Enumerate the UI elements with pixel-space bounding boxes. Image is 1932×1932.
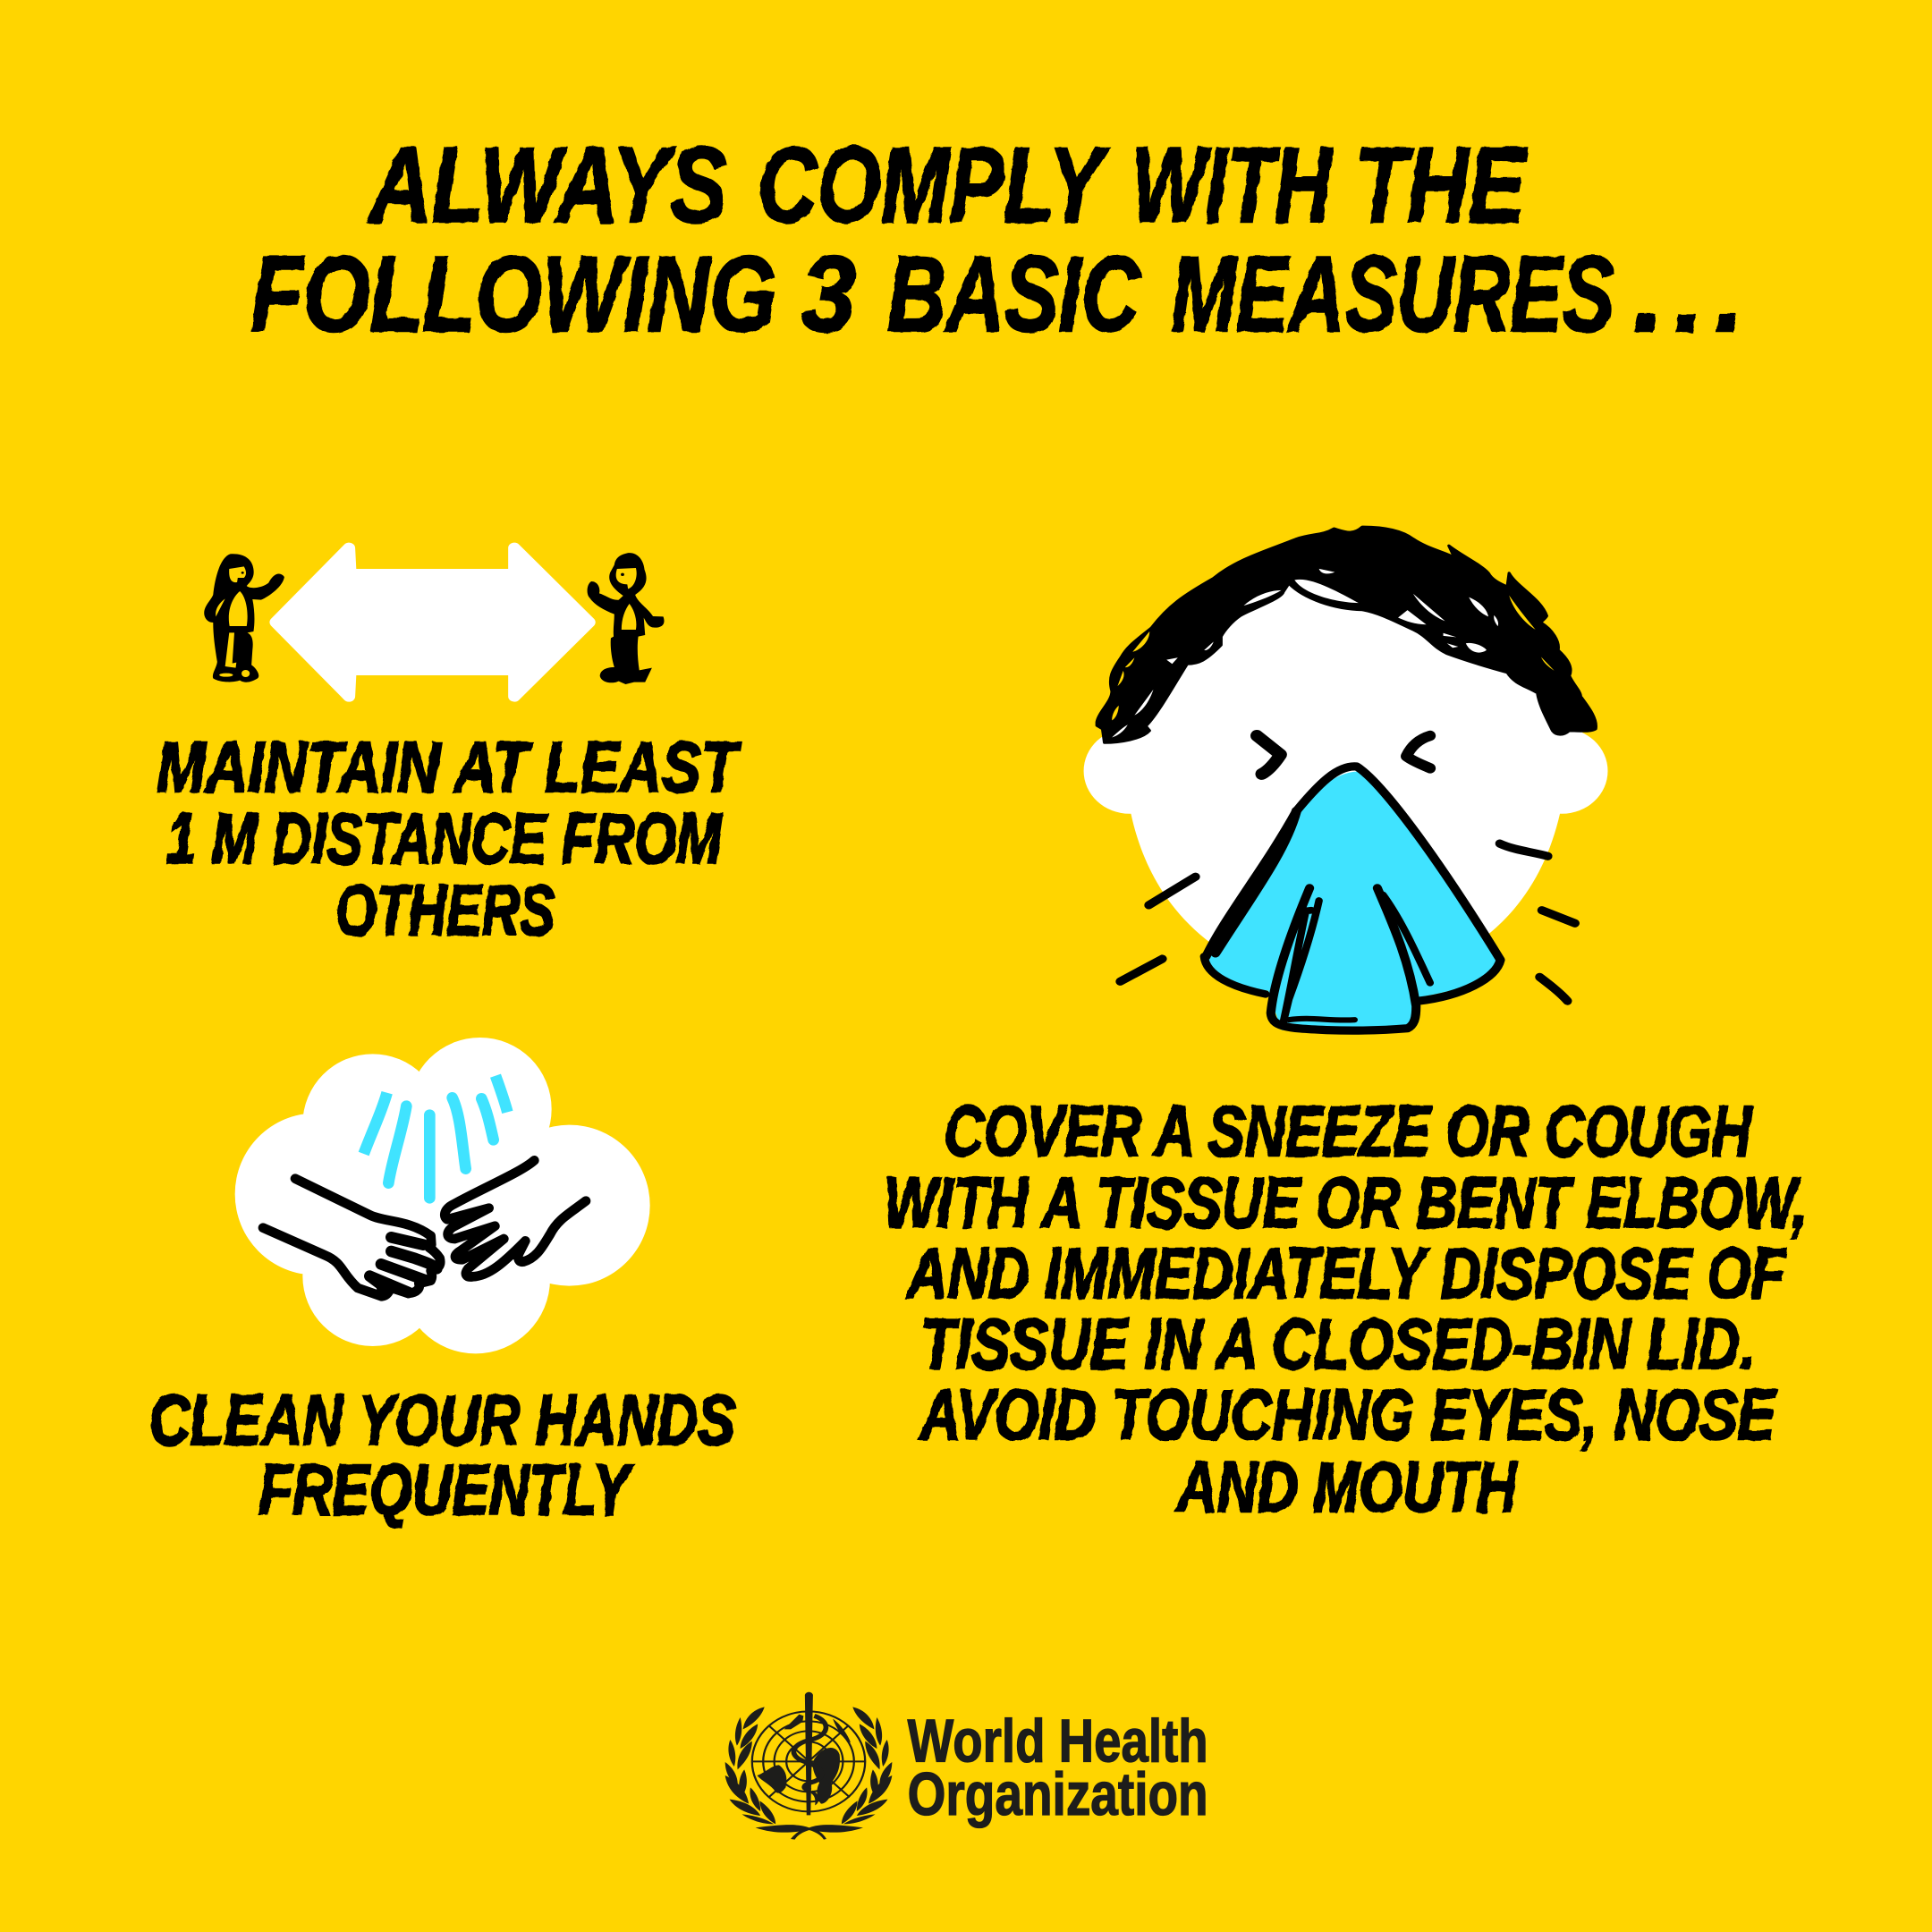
icon: left person (204, 554, 284, 682)
emblem (725, 1692, 892, 1840)
eyes (1257, 736, 1430, 774)
head (1084, 575, 1607, 1006)
title: THE (1355, 125, 1528, 245)
logo wordmark: Organization (908, 1761, 1208, 1828)
text: distance measure (157, 727, 741, 950)
title: ALWAYS (368, 125, 727, 245)
text: hand washing measure: FREQUENTLY (258, 1450, 634, 1530)
text: hand washing measure (149, 1380, 735, 1530)
logo wordmark: World Health (908, 1707, 1208, 1775)
wreath (725, 1707, 775, 1824)
title: BASIC (887, 234, 1141, 354)
water streams (364, 1076, 507, 1198)
cloud (235, 1038, 650, 1353)
icon: hand washing cloud (235, 1038, 650, 1353)
logo wordmark (908, 1707, 1208, 1828)
text: cover sneeze measure: AND MOUTH (1175, 1447, 1519, 1527)
tissue (1200, 767, 1503, 1032)
text: cover sneeze measure (884, 1091, 1808, 1527)
text: cover sneeze measure: TISSUE IN A CLOSED-BIN LID. (920, 1304, 1756, 1384)
text: hand washing measure: CLEAN YOUR HANDS (149, 1380, 735, 1460)
title: FOLLOWING (250, 234, 776, 354)
text: distance measure: OTHERS (335, 870, 555, 950)
text: distance measure: MAINTAIN AT LEAST (157, 727, 741, 807)
icon: two people with a double arrow between them (204, 548, 665, 697)
sneeze marks (1120, 843, 1575, 1001)
text: distance measure: 1 M DISTANCE FROM (166, 799, 724, 878)
arrow: double-headed distance arrow (275, 548, 589, 697)
title: MEASURES (1171, 234, 1614, 354)
title: WITH (1131, 125, 1333, 245)
title: ... (1633, 234, 1744, 354)
logo: World Health Organization (725, 1692, 1208, 1840)
title: COMPLY (758, 125, 1110, 245)
title (250, 125, 1744, 354)
icon: sneezing face with tissue (1084, 527, 1607, 1032)
hair (1097, 527, 1596, 742)
icon: right person (588, 553, 665, 684)
title: 3 (801, 234, 856, 354)
hands (263, 1160, 586, 1296)
